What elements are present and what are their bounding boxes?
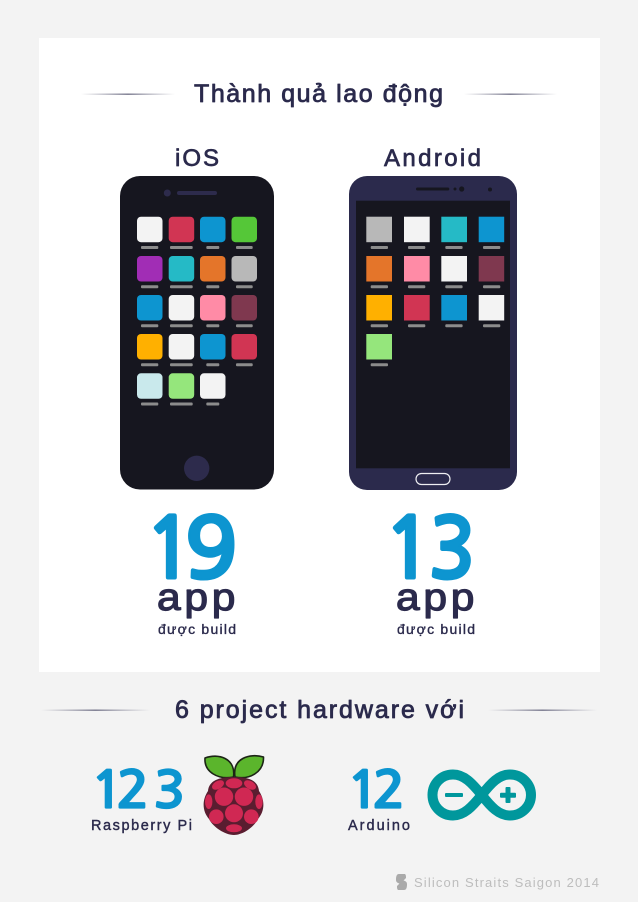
stat: 12 Arduino: Arduino [348,818,410,834]
Android phone [349,176,517,490]
iOS app icons [137,217,257,406]
stat: 123 Raspberry Pi: 1 [90,765,124,816]
heading: Android: Android [384,145,481,172]
icon: raspberry pi logo [204,756,264,835]
icon: Silicon Straits logo [396,874,407,890]
stat: 13 apps built [383,508,476,637]
stat: 12 Arduino: 2 [372,765,406,816]
stat: 19 apps built: được build [158,621,236,637]
iOS phone [120,176,274,490]
stat: 123 Raspberry Pi: 2 [116,765,150,816]
stat: 123 Raspberry Pi [90,765,192,834]
stat: 19 apps built: app [157,575,235,618]
stat: 13 apps built: được build [397,621,475,637]
stat: 13 apps built: 1 [383,508,434,592]
stat: 13 apps built: app [396,575,474,618]
footer credit: Silicon Straits Saigon 2014 [414,875,599,890]
stat: 123 Raspberry Pi: Raspberry Pi [91,818,192,834]
Android app icons [366,217,504,366]
stat: 19 apps built: 9 [184,508,238,591]
stat: 12 Arduino: 1 [346,765,380,816]
heading: iOS: iOS [175,145,219,172]
heading: 6 project hardware với: 6 project hardware với [175,696,464,724]
icon: arduino logo [432,774,531,816]
stat: 19 apps built [144,508,238,637]
heading: Thành quả lao động: Thành quả lao động [194,80,443,108]
stat: 13 apps built: 3 [428,509,476,592]
stat: 12 Arduino [346,765,410,834]
stat: 123 Raspberry Pi: 3 [153,765,186,816]
stat: 19 apps built: 1 [144,508,195,592]
